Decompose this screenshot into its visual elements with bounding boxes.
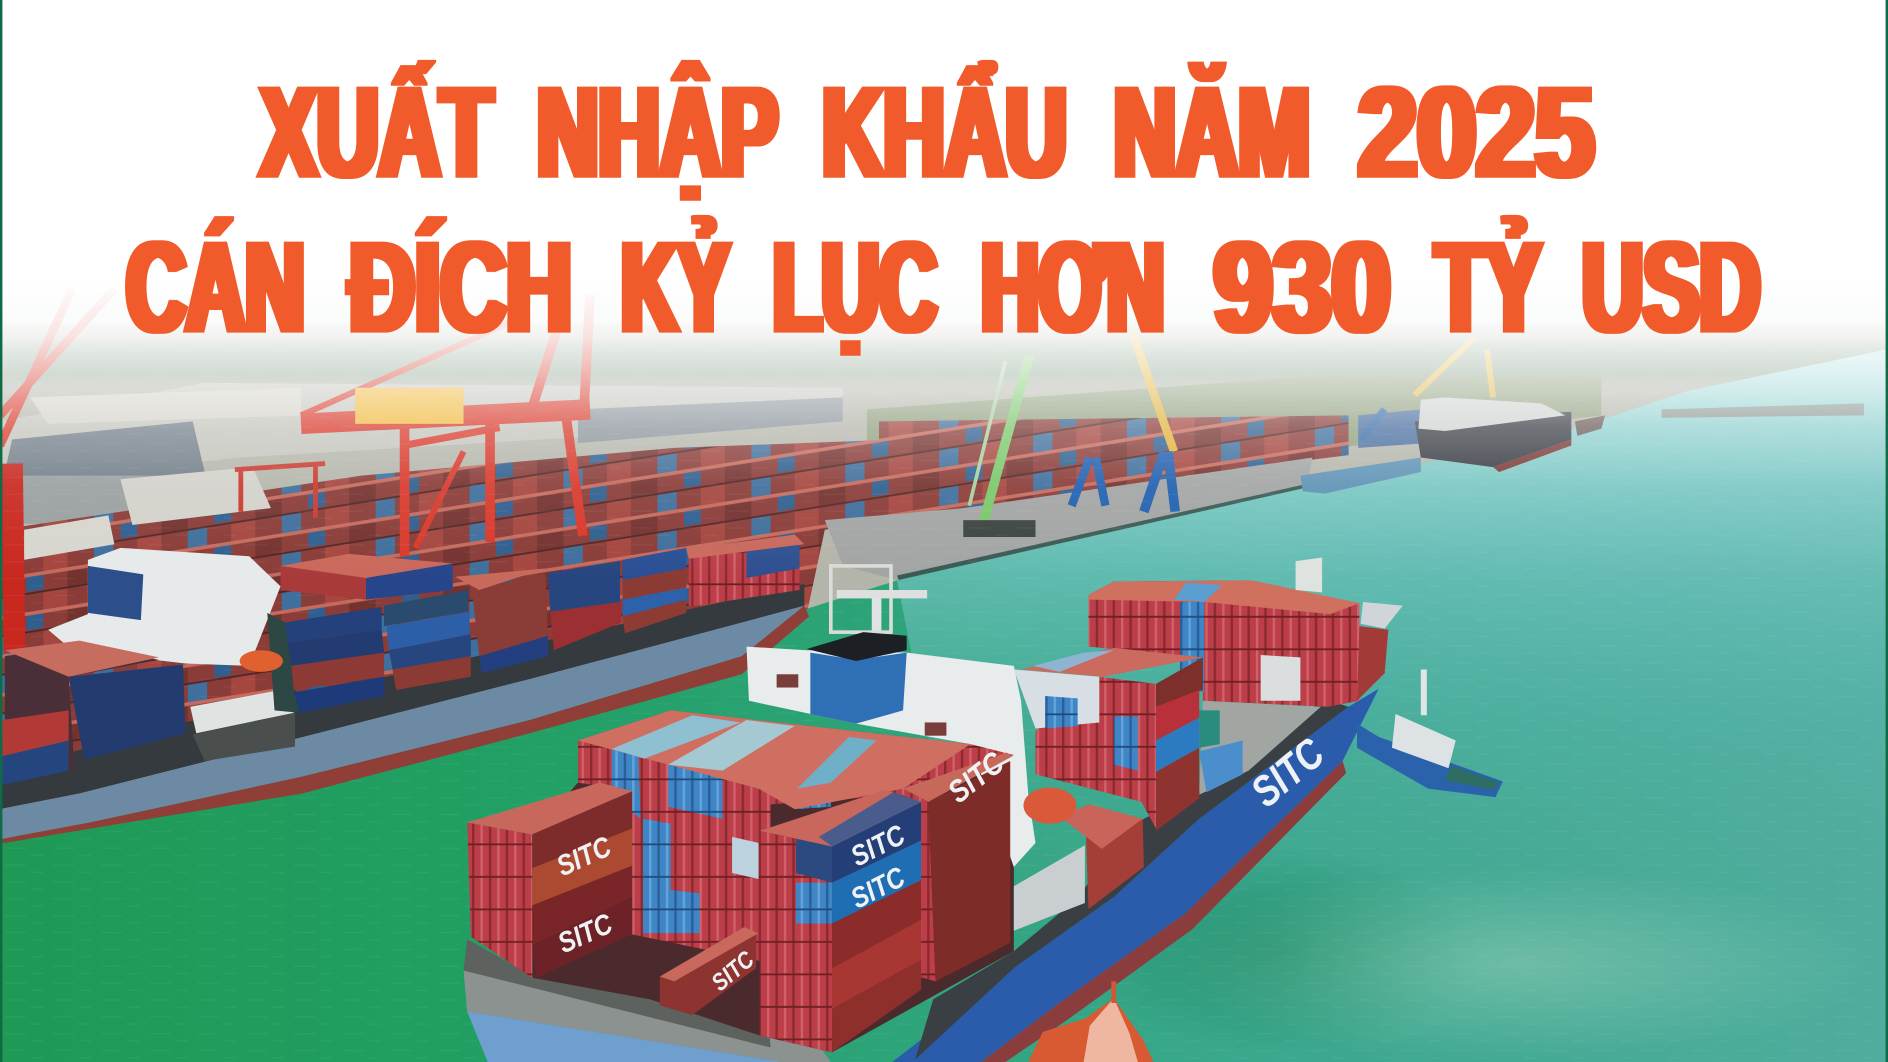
blue SITC tower: SITC bbox=[846, 860, 911, 915]
title line 2: HƠN bbox=[981, 215, 1164, 359]
teal and blue deck boxes bbox=[1199, 710, 1220, 748]
left container ship bbox=[0, 535, 809, 843]
water bbox=[0, 349, 1888, 1062]
right brown tower: SITC bbox=[942, 745, 1012, 810]
warehouses bbox=[0, 383, 843, 524]
title line 1: XUẤT bbox=[260, 61, 492, 205]
rear left tower: SITC bbox=[553, 907, 618, 960]
title line 2: USD bbox=[1582, 215, 1760, 359]
forward block bbox=[1088, 557, 1403, 707]
funnel top bbox=[807, 632, 907, 661]
aft deck bbox=[464, 939, 771, 1048]
title bbox=[126, 61, 1760, 359]
left ship funnel bbox=[88, 566, 143, 620]
left ship containers bbox=[2, 535, 804, 785]
rear left tower bbox=[467, 783, 632, 978]
middle block bbox=[1014, 648, 1203, 831]
title line 2 bbox=[126, 215, 1760, 359]
deck stack small bbox=[1085, 806, 1144, 909]
title line 1: KHẨU bbox=[822, 61, 1067, 205]
left ship bridge bbox=[48, 548, 281, 666]
title line 2: 930 bbox=[1214, 215, 1391, 359]
dark base behind container mass bbox=[532, 747, 1014, 1052]
left ship dark deck band bbox=[0, 584, 804, 809]
quay bbox=[825, 458, 1312, 585]
right brown tower bbox=[903, 745, 1013, 981]
superstructure bbox=[747, 566, 1036, 867]
top white fade bbox=[0, 0, 1888, 578]
orange bottom tugboat bbox=[1028, 981, 1154, 1062]
small aft stack: SITC bbox=[706, 945, 760, 996]
left ship red waterline bbox=[0, 606, 809, 843]
lifeboat bbox=[1023, 787, 1076, 824]
title line 2: CÁN bbox=[126, 215, 305, 359]
distant bulk ship bbox=[1300, 397, 1864, 494]
hull bbox=[892, 689, 1379, 1062]
scaffold and deck bbox=[1014, 845, 1085, 931]
title line 2: ĐÍCH bbox=[349, 215, 572, 359]
bridge windows bbox=[777, 674, 946, 736]
title line 2: LỤC bbox=[773, 215, 937, 359]
blue SITC tower bbox=[760, 790, 921, 1052]
forward gray deck bbox=[1199, 701, 1321, 795]
right side cranes bbox=[963, 331, 1493, 537]
yellow crane block on gantry bbox=[355, 388, 464, 424]
title line 2: KỶ bbox=[621, 215, 730, 359]
left ship lifeboat bbox=[240, 650, 283, 672]
red boot top bbox=[981, 761, 1346, 1062]
title line 1 bbox=[260, 61, 1594, 205]
funnel bbox=[810, 653, 907, 724]
title line 2: TỶ bbox=[1435, 215, 1541, 359]
title line 1: NĂM bbox=[1114, 61, 1310, 205]
rear centre block bbox=[578, 710, 1014, 963]
background: land and sky bbox=[2, 325, 1886, 839]
rear left tower: SITC bbox=[552, 830, 617, 882]
title line 1: NHẬP bbox=[537, 61, 778, 205]
stern rail bbox=[464, 970, 831, 1062]
red gantry cranes bbox=[0, 289, 590, 653]
stern bbox=[467, 1011, 783, 1062]
blue SITC tower: SITC bbox=[846, 818, 911, 873]
deck dark band bbox=[915, 698, 1358, 1060]
container yard: right bbox=[879, 409, 1427, 515]
left ship hull bbox=[0, 606, 804, 839]
small aft stack bbox=[660, 927, 760, 1015]
main SITC ship bbox=[464, 557, 1403, 1062]
title line 1: 2025 bbox=[1358, 61, 1594, 205]
container yard: left bbox=[0, 439, 897, 795]
right tugboat bbox=[1357, 669, 1503, 797]
left edge green strip bbox=[0, 0, 2, 1062]
hull name: SITC bbox=[1242, 728, 1334, 817]
right edge green strip bbox=[1886, 0, 1888, 1062]
